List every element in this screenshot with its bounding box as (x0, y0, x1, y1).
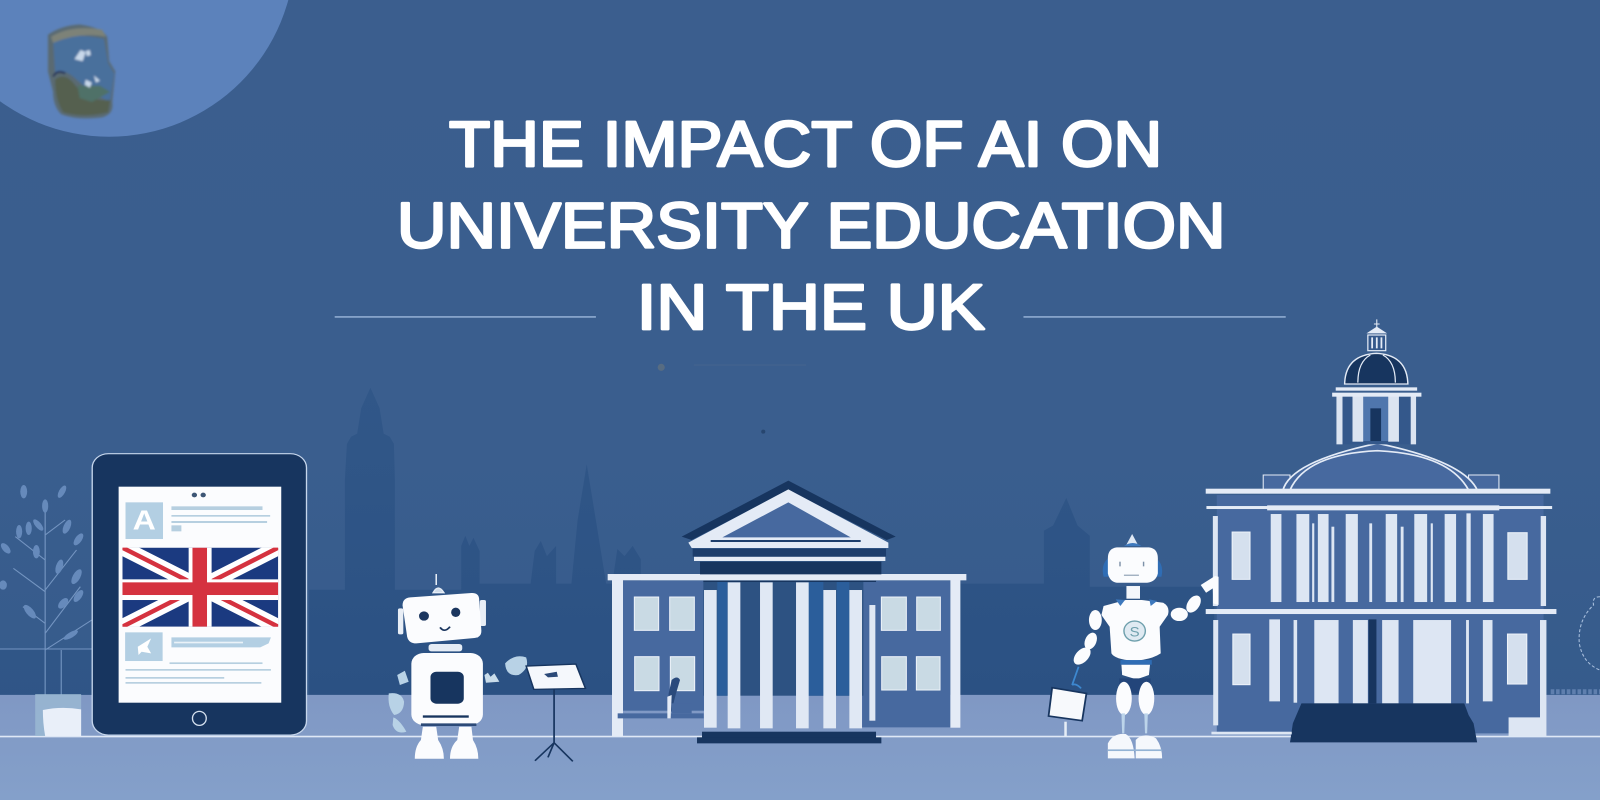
plinth block (1509, 717, 1541, 736)
head (403, 593, 481, 643)
card A: A (133, 505, 156, 536)
lower columns (1213, 619, 1546, 736)
cornices (1206, 489, 1550, 494)
left tree and pot (0, 485, 92, 736)
hand tablet (1049, 688, 1086, 736)
feet (1108, 734, 1135, 758)
antenna (433, 574, 444, 593)
feet (415, 727, 444, 759)
steps (702, 732, 876, 738)
drum and columns (1332, 387, 1421, 444)
neck (429, 644, 462, 651)
title rule left (335, 316, 596, 318)
tree (0, 485, 92, 695)
body (411, 653, 483, 725)
card map (125, 632, 163, 661)
robot left (388, 574, 585, 761)
head (1108, 547, 1158, 583)
near hand (484, 673, 499, 683)
roof arch (1283, 443, 1478, 491)
title: IN THE UK (637, 271, 985, 343)
UK flag (122, 548, 278, 627)
main facade (1217, 495, 1544, 733)
entablature (703, 581, 876, 582)
headphones (1103, 558, 1162, 577)
music stand with tablet (526, 664, 585, 761)
ears (398, 608, 403, 634)
wings (623, 581, 704, 711)
lantern (1366, 319, 1387, 351)
tablet screen (119, 487, 281, 703)
robot right: S (1130, 625, 1140, 641)
arms (1070, 576, 1219, 668)
upper columns (1213, 513, 1546, 606)
pot (35, 694, 81, 736)
tablet with UK flag (92, 454, 307, 735)
title (397, 108, 1226, 343)
skyline silhouette (0, 388, 1214, 696)
title: THE IMPACT OF AI ON (449, 108, 1162, 180)
antenna (1126, 534, 1139, 546)
columns (704, 582, 875, 728)
steps (1290, 703, 1477, 742)
legs (1116, 682, 1132, 715)
corner circle with globe (0, 0, 295, 137)
card A (126, 502, 163, 539)
domed building right (1206, 319, 1556, 742)
ground (0, 695, 1600, 800)
dome (1345, 353, 1408, 384)
side windows (1232, 532, 1527, 685)
neck (1126, 586, 1140, 599)
far arm (388, 671, 409, 733)
figure on bench (618, 678, 704, 718)
robot right (1049, 534, 1219, 758)
icon: globe (48, 24, 115, 118)
specks (658, 364, 806, 434)
home button (192, 711, 206, 725)
pediment (682, 481, 896, 540)
central university building (608, 481, 966, 743)
torso (1101, 600, 1169, 661)
title rule right (1023, 316, 1286, 318)
title: UNIVERSITY EDUCATION (397, 189, 1226, 261)
hips (1120, 660, 1152, 665)
windows (634, 597, 940, 691)
dashed circle icon far right (1551, 597, 1600, 692)
